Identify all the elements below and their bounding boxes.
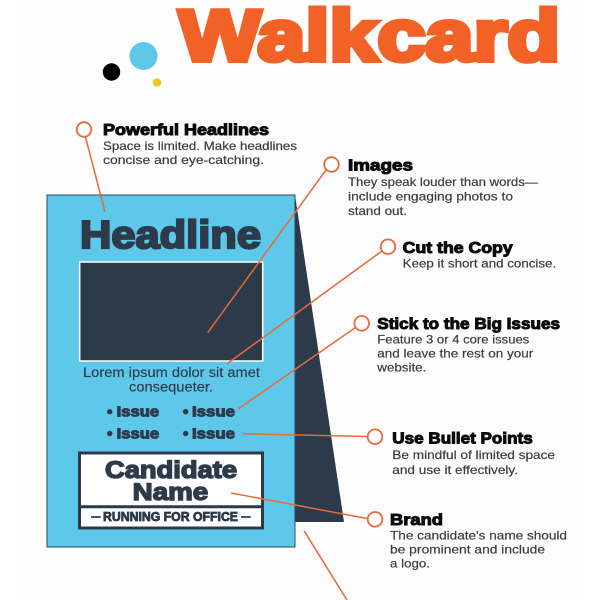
callout: use bullet points: Be mindful of limited space [392,448,555,462]
callout: powerful headlines: concise and eye-catching. [103,153,264,167]
candidate name box [80,453,262,528]
walkcard fold shadow [295,195,344,522]
callout: use bullet points: and use it effectively. [392,463,518,477]
callout: stick to the big issues: and leave the rest on your [377,347,533,361]
candidate name box: Candidate [105,457,237,484]
decorative dots [103,42,161,87]
callout: stick to the big issues: website. [376,361,426,375]
callout: images: stand out. [348,204,407,218]
issue bullets: Issue [192,427,235,443]
callout: stick to the big issues: Stick to the Big Issues [377,316,560,333]
callout: use bullet points [243,429,555,477]
callout: powerful headlines [77,122,297,212]
callout: images: Images [348,158,413,174]
image placeholder [80,262,263,361]
callout: cut the copy: Keep it short and concise. [403,257,556,271]
callout: use bullet points: Use Bullet Points [392,430,533,447]
callout: brand: be prominent and include [390,542,545,556]
candidate name box: Name [133,479,208,506]
callout: stick to the big issues [238,316,560,409]
callout: powerful headlines: Space is limited. Make headlines [103,139,297,153]
card headline: Headline [80,214,261,257]
issue bullets: Issue [192,405,235,421]
callout: brand: The candidate's name should [390,528,567,542]
card body text [83,365,260,394]
callout: images: include engaging photos to [348,190,513,204]
card body text: consequeter. [129,380,213,394]
callout: images: They speak louder than words— [348,175,538,189]
callout: images [208,157,538,333]
card body text: Lorem ipsum dolor sit amet [83,365,260,380]
issue bullets [107,405,235,443]
callout: brand: Brand [390,512,443,529]
candidate name box: RUNNING FOR OFFICE [103,510,238,524]
walkcard panel [47,195,295,547]
callout: brand: a logo. [390,557,430,571]
callout: stick to the big issues: Feature 3 or 4 core issues [377,332,529,346]
issue bullets: Issue [117,405,159,421]
arrow: bottom leader line [304,531,347,600]
callout: brand [231,493,567,571]
callout: cut the copy [227,239,556,364]
callout: powerful headlines: Powerful Headlines [103,122,269,139]
issue bullets: Issue [117,427,159,443]
callout: cut the copy: Cut the Copy [403,240,513,257]
